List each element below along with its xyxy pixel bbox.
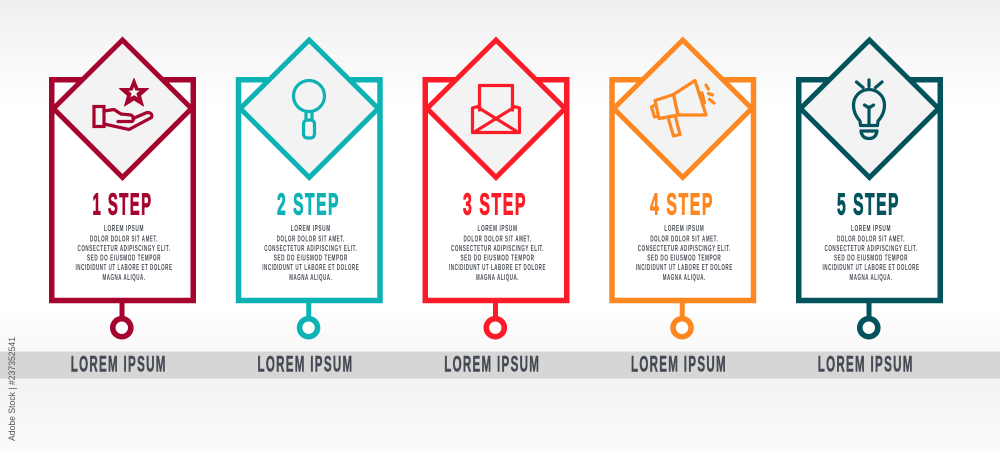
text block 1: MAGNA ALIQUA. (102, 272, 146, 282)
label 5: LOREM IPSUM (818, 352, 914, 377)
icon: envelope (472, 86, 520, 132)
text block 4: CONSECTETUR ADIPISCINGY ELIT. (638, 243, 731, 253)
connector 4 (673, 303, 691, 337)
text block 5: DOLOR DOLOR SIT AMET. (837, 234, 905, 244)
panel: step 3 (425, 40, 567, 377)
card frame 5 (799, 80, 940, 300)
panel: step 1: 1 STEP (92, 188, 152, 222)
text block 3: INCIDIDUNT UT LABORE ET DOLORE (449, 262, 546, 272)
connector 2 (300, 303, 318, 337)
text block 3: SED DO EIUSMOD TEMPOR (460, 252, 534, 262)
text block 3: LOREM IPSUM (478, 223, 518, 233)
text block 5 (822, 223, 920, 282)
connector 5 (860, 303, 878, 337)
text block 1: DOLOR DOLOR SIT AMET. (90, 234, 158, 244)
text block 2: MAGNA ALIQUA. (289, 272, 332, 282)
icon: light bulb (854, 80, 884, 138)
panel: step 2 (238, 40, 380, 377)
text block 1 (76, 223, 172, 282)
text block 4: LOREM IPSUM (664, 223, 704, 233)
diamond 3 (427, 40, 565, 178)
label 2: LOREM IPSUM (257, 352, 353, 377)
text block 1: INCIDIDUNT UT LABORE ET DOLORE (76, 262, 172, 272)
card frame 4 (612, 80, 754, 300)
text block 4 (636, 223, 733, 282)
label 1: LOREM IPSUM (71, 352, 167, 377)
card frame 1 (52, 80, 193, 300)
text block 4: SED DO EIUSMOD TEMPOR (647, 252, 721, 262)
text block 5: LOREM IPSUM (851, 223, 891, 233)
text block 2 (262, 223, 359, 282)
heading: 3 step: 3 STEP (463, 188, 527, 222)
icon: magnifier (294, 80, 324, 138)
text block 5: CONSECTETUR ADIPISCINGY ELIT. (824, 243, 918, 253)
heading: 4 step: 4 STEP (650, 188, 714, 222)
text block 2: INCIDIDUNT UT LABORE ET DOLORE (262, 262, 359, 272)
text block 5: SED DO EIUSMOD TEMPOR (834, 252, 908, 262)
panel: step 5 (799, 40, 940, 377)
text block 1: SED DO EIUSMOD TEMPOR (87, 252, 161, 262)
card frame 3 (425, 80, 567, 300)
label 4: LOREM IPSUM (631, 352, 727, 377)
heading: 2 step: 2 STEP (277, 188, 340, 222)
connector 1 (113, 303, 131, 337)
icon: hand with star (94, 78, 152, 130)
text block 4: DOLOR DOLOR SIT AMET. (650, 234, 718, 244)
vertical stock caption: Adobe Stock | #237352541 (7, 337, 18, 441)
text block 4: MAGNA ALIQUA. (663, 272, 706, 282)
text block 1: CONSECTETUR ADIPISCINGY ELIT. (78, 243, 170, 253)
heading: 5 step: 5 STEP (837, 188, 900, 222)
text block 2: CONSECTETUR ADIPISCINGY ELIT. (264, 243, 357, 253)
diamond 4 (614, 40, 752, 178)
diamond 5 (800, 40, 938, 178)
text block 2: LOREM IPSUM (291, 223, 331, 233)
text block 4: INCIDIDUNT UT LABORE ET DOLORE (636, 262, 733, 272)
text block 2: DOLOR DOLOR SIT AMET. (277, 234, 345, 244)
label 3: LOREM IPSUM (444, 352, 540, 377)
grey band (0, 352, 1000, 378)
connector 3 (486, 303, 504, 337)
icon: megaphone (652, 80, 714, 136)
diamond 2 (240, 40, 378, 178)
panel: step 4 (612, 40, 754, 377)
text block 3: CONSECTETUR ADIPISCINGY ELIT. (451, 243, 544, 253)
text block 3 (449, 223, 546, 282)
text block 1: LOREM IPSUM (104, 223, 144, 233)
panel: step 1 (52, 40, 193, 377)
text block 3: DOLOR DOLOR SIT AMET. (464, 234, 532, 244)
text block 3: MAGNA ALIQUA. (476, 272, 519, 282)
text block 5: MAGNA ALIQUA. (850, 272, 892, 282)
diamond 1 (54, 40, 192, 178)
card frame 2 (238, 80, 380, 300)
text block 2: SED DO EIUSMOD TEMPOR (274, 252, 348, 262)
